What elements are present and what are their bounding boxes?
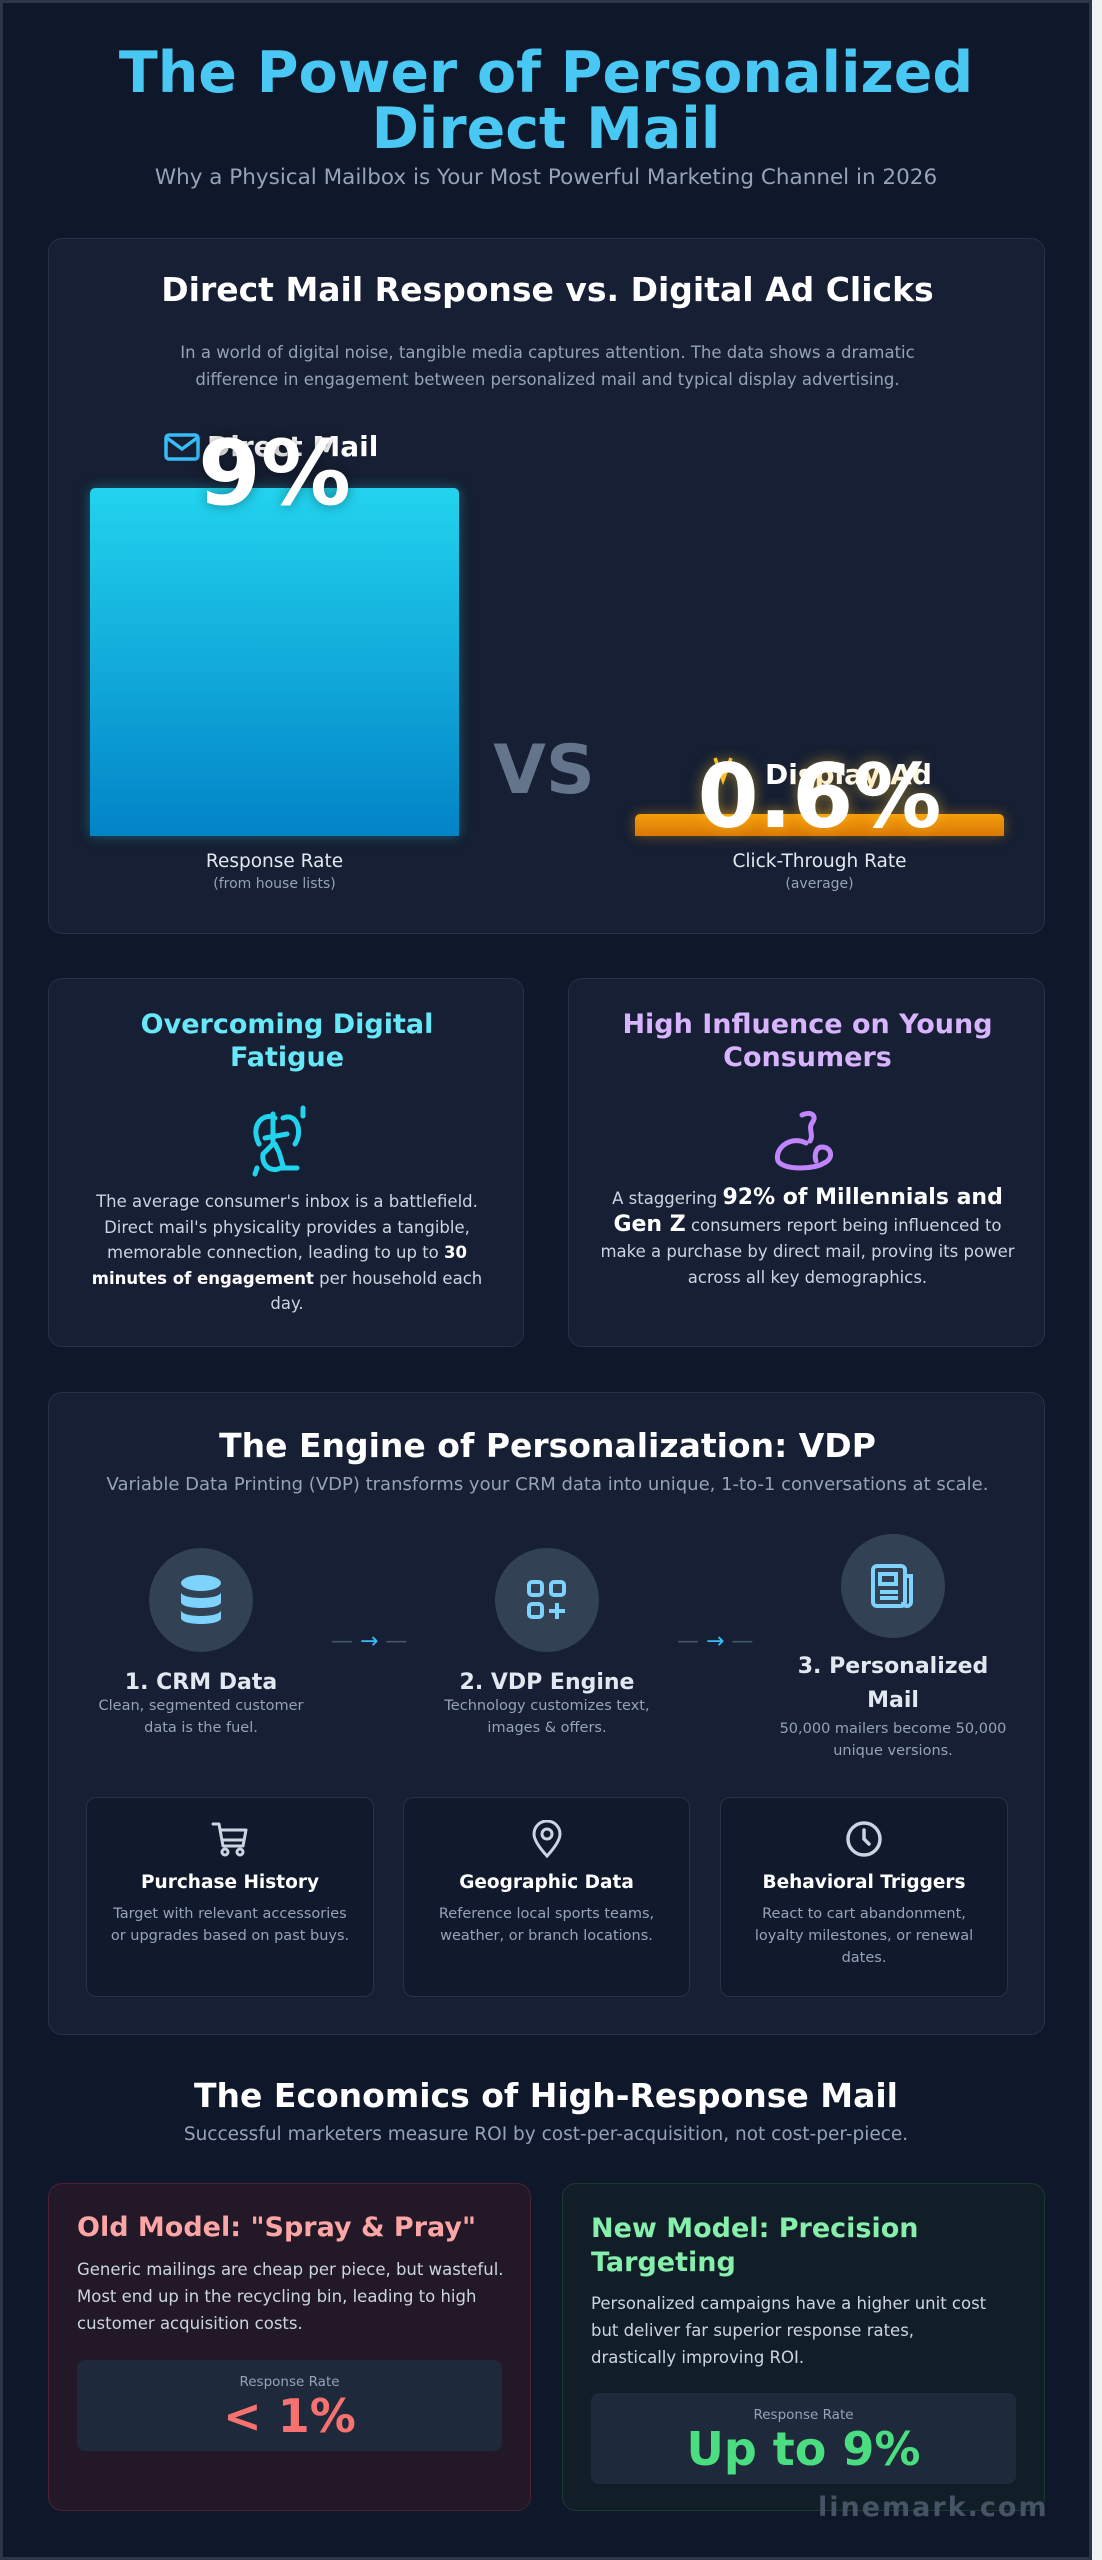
bar: direct mail [90,488,459,836]
heading: New Model: Precision [591,2213,919,2244]
chart heading: Direct Mail Response vs. Digital Ad Clicks [161,270,934,309]
arrow 2: — → — [677,1629,753,1654]
heading: Targeting [591,2247,736,2278]
body text: A staggering 92% of Millennials and Gen Z consumers report being influenced to make a purchase by direct mail, proving its power across all key demographics. [600,1185,1015,1287]
panel: new model [562,2183,1045,2511]
caption: click-through rate [732,851,907,892]
heading: Fatigue [230,1042,344,1073]
caption: click-through rate: (average) [785,876,854,892]
value: 9%: 9% [198,421,351,526]
card: behavioral triggers: Behavioral Triggers [762,1872,966,1893]
caption: response rate [206,851,343,892]
heading: High Influence on Young [622,1009,993,1040]
stat: <1%: Response Rate [239,2374,340,2390]
card: geographic data: Geographic Data [459,1872,634,1893]
step 3: personalized mail: 3. Personalized [798,1654,988,1679]
heading [141,1009,433,1073]
stat: up to 9% [591,2393,1016,2484]
heading: Old Model: "Spray & Pray" [77,2212,476,2243]
label: display ad: Display Ad [765,758,932,791]
step 3: personalized mail: 50,000 mailers become 50,000 unique versions. [780,1721,1006,1759]
step 2: VDP engine: Technology customizes text, images & offers. [444,1698,650,1736]
step 2: VDP engine [444,1548,650,1736]
step 3: personalized mail: Mail [867,1688,919,1713]
icon: clock [846,1821,882,1857]
chart description: In a world of digital noise, tangible media captures attention. The data shows a dramatic difference in engagement between personalized mail and typical display advertising. [180,343,915,389]
body: Generic mailings are cheap per piece, but wasteful. Most end up in the recycling bin, leading to high customer acquisition costs. [77,2260,504,2333]
subtitle: Why a Physical Mailbox is Your Most Powerful Marketing Channel in 2026 [155,165,937,190]
icon: map pin [532,1820,562,1858]
panel: old model [48,2183,531,2511]
body: Personalized campaigns have a higher unit cost but deliver far superior response rates, drastically improving ROI. [591,2294,986,2367]
heading [622,1009,993,1073]
heading: The Engine of Personalization: VDP [219,1426,876,1465]
step 3: personalized mail [780,1534,1006,1759]
stat: <1%: < 1% [223,2389,356,2443]
heading: Consumers [723,1042,892,1073]
title [119,40,973,162]
body text: The average consumer's inbox is a battlefield. Direct mail's physicality provides a tangible, memorable connection, leading to up to 30 minutes of engagement per household each day. [92,1192,482,1313]
label: direct mail: Direct Mail [207,430,378,463]
panel: comparison chart [48,238,1045,934]
card: behavioral triggers: React to cart abandonment, loyalty milestones, or renewal dates. [755,1906,973,1966]
value: 0.6%: 0.6% [697,745,942,848]
arrow 1: — → — [331,1629,407,1654]
economics subheading: Successful marketers measure ROI by cost-per-acquisition, not cost-per-piece. [184,2124,908,2145]
card: geographic data: Reference local sports teams, weather, or branch locations. [439,1906,654,1944]
icon: display ad [713,757,733,785]
panel: VDP engine [48,1392,1045,2035]
caption: response rate: Response Rate [206,851,343,872]
icon: cart [212,1822,248,1856]
card: purchase history: Purchase History [141,1872,319,1893]
step 1: CRM data [98,1548,304,1736]
heading [591,2213,919,2278]
step 1: CRM data: Clean, segmented customer data is the fuel. [98,1698,303,1736]
stat: <1% [77,2360,502,2451]
step 1: CRM data: 1. CRM Data [125,1670,277,1695]
stat: up to 9%: Up to 9% [686,2422,920,2476]
watermark: linemark.com [818,2492,1049,2523]
vs label: VS [493,731,595,810]
icon: fatigue [252,1106,306,1176]
icon: envelope [164,433,200,461]
caption: click-through rate: Click-Through Rate [732,851,907,872]
stat: up to 9%: Response Rate [753,2407,854,2423]
card: purchase history: Target with relevant accessories or upgrades based on past buys. [111,1906,349,1944]
icon: database [149,1548,253,1652]
card: geographic data [403,1797,690,1997]
icon: grid plus [495,1548,599,1652]
icon: purchase influence [774,1110,834,1170]
economics heading: The Economics of High-Response Mail [194,2076,898,2115]
card: behavioral triggers [720,1797,1008,1997]
title: Direct Mail [372,96,720,162]
card: purchase history [86,1797,374,1997]
bar: display ad [635,814,1004,836]
panel: digital fatigue [48,978,524,1347]
caption: response rate: (from house lists) [213,876,336,892]
step 2: VDP engine: 2. VDP Engine [460,1670,634,1695]
icon: newspaper [841,1534,945,1638]
title: The Power of Personalized [119,40,973,106]
heading: Overcoming Digital [141,1009,433,1040]
subheading: Variable Data Printing (VDP) transforms your CRM data into unique, 1-to-1 conversations at scale. [107,1474,988,1495]
panel: young consumers [568,978,1045,1347]
